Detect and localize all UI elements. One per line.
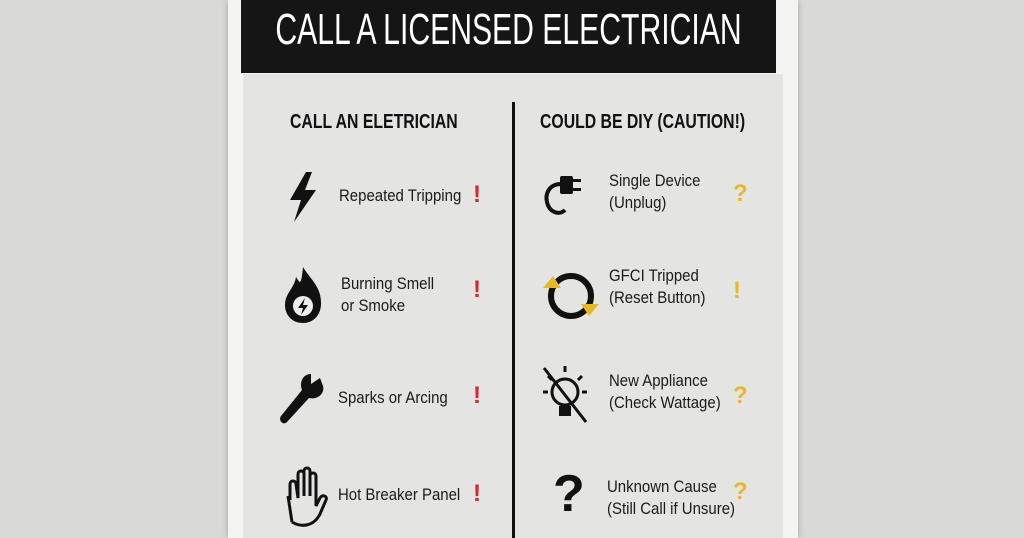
header bar	[241, 0, 776, 73]
text: hot panel: Hot Breaker Panel	[338, 485, 460, 504]
mark: ?	[733, 180, 748, 207]
text: new appliance	[609, 371, 721, 412]
icon: lightning	[290, 172, 316, 222]
text: unknown: Unknown Cause	[607, 477, 717, 496]
inner panel	[243, 74, 783, 538]
icon: fire	[285, 267, 321, 323]
mark: ?	[733, 382, 748, 409]
heading left: CALL AN ELETRICIAN	[290, 111, 458, 133]
text: burning smell: Burning Smell	[341, 274, 434, 293]
icon: bulb crossed	[542, 366, 588, 423]
text: gfci: GFCI Tripped	[609, 266, 699, 285]
icon: reset arrows	[543, 273, 599, 319]
icon: plug	[544, 176, 581, 215]
text: burning smell: or Smoke	[341, 296, 405, 315]
mark: ?	[733, 478, 748, 505]
text: new appliance: (Check Wattage)	[609, 393, 721, 412]
mark: !	[473, 276, 481, 303]
mark: !	[733, 277, 741, 304]
text: burning smell	[341, 274, 434, 315]
text: single device: Single Device	[609, 171, 700, 190]
text: single device: (Unplug)	[609, 193, 666, 212]
mark: !	[473, 382, 481, 409]
text: single device	[609, 171, 700, 212]
mark: !	[473, 480, 481, 507]
mark: !	[473, 181, 481, 208]
title: CALL A LICENSED ELECTRICIAN	[275, 5, 742, 54]
text: gfci: (Reset Button)	[609, 288, 705, 307]
divider	[512, 102, 515, 538]
text: unknown: (Still Call if Unsure)	[607, 499, 735, 518]
text: unknown	[607, 477, 735, 518]
icon: wrench	[280, 374, 324, 424]
text: new appliance: New Appliance	[609, 371, 708, 390]
text: sparks: Sparks or Arcing	[338, 388, 448, 407]
icon: hand	[286, 466, 328, 527]
text: repeated tripping: Repeated Tripping	[339, 186, 461, 205]
text: gfci	[609, 266, 705, 307]
poster	[228, 0, 798, 538]
icon: question: ?	[553, 465, 585, 523]
heading right: COULD BE DIY (CAUTION!)	[540, 111, 745, 133]
